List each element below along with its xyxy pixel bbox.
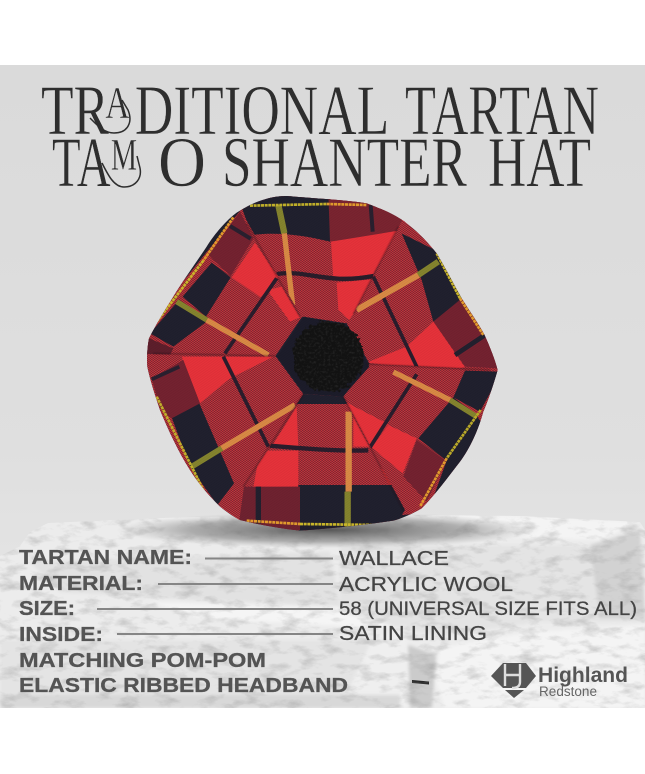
rocks: white stone platform bbox=[0, 514, 645, 708]
logo sub-wordmark: Redstone bbox=[539, 684, 597, 699]
value: satin lining: SATIN LINING bbox=[339, 623, 487, 645]
title ligature swashes bbox=[90, 100, 140, 187]
spec list: labels bbox=[19, 547, 348, 697]
leader lines bbox=[97, 558, 333, 634]
hat: tartan tam with six panels bbox=[147, 196, 498, 531]
title line 2: tam: M bbox=[111, 131, 137, 181]
value: wallace: WALLACE bbox=[339, 548, 449, 570]
feature: elastic ribbed headband: ELASTIC RIBBED HEADBAND bbox=[19, 675, 348, 697]
panel: top left bbox=[147, 210, 302, 356]
value: acrylic wool: ACRYLIC WOOL bbox=[339, 574, 513, 596]
centre hexagon bbox=[330, 365, 370, 396]
title line 2: shanter: SHANTER bbox=[222, 124, 467, 202]
title line 1: traditional: A bbox=[105, 78, 130, 128]
fold lines bbox=[153, 223, 490, 510]
fabric weave overlay bbox=[148, 212, 497, 518]
label: material: MATERIAL: bbox=[19, 573, 143, 595]
title line 1: traditional: TR bbox=[41, 71, 109, 150]
panel: top right bbox=[346, 220, 498, 370]
title line 2: o: O bbox=[158, 124, 206, 202]
hem stripes bbox=[155, 204, 483, 525]
panel: bottom left bbox=[147, 354, 304, 520]
title line 2: hat: HAT bbox=[488, 124, 591, 202]
icon: pom-pom bbox=[293, 321, 364, 392]
label: inside: INSIDE: bbox=[19, 624, 103, 646]
icon: diamond mark bbox=[491, 663, 536, 698]
panel: top bbox=[240, 196, 406, 324]
value: size 58: 58 (UNIVERSAL SIZE FITS ALL) bbox=[339, 599, 637, 620]
title bbox=[41, 71, 599, 203]
spec list: values bbox=[339, 548, 637, 645]
logo: Highland Redstone bbox=[491, 663, 628, 699]
title line 2: tam: TA bbox=[52, 123, 111, 203]
label: size: SIZE: bbox=[19, 598, 75, 620]
panel: bottom right bbox=[344, 364, 498, 515]
logo wordmark: Highland bbox=[538, 664, 628, 687]
feature: matching pom-pom: MATCHING POM-POM bbox=[19, 650, 266, 672]
panel: bottom bbox=[238, 394, 405, 530]
title line 1: traditional: DITIONAL bbox=[135, 71, 389, 150]
label: tartan name: TARTAN NAME: bbox=[19, 547, 192, 569]
hat shadow on rock bbox=[116, 512, 540, 548]
